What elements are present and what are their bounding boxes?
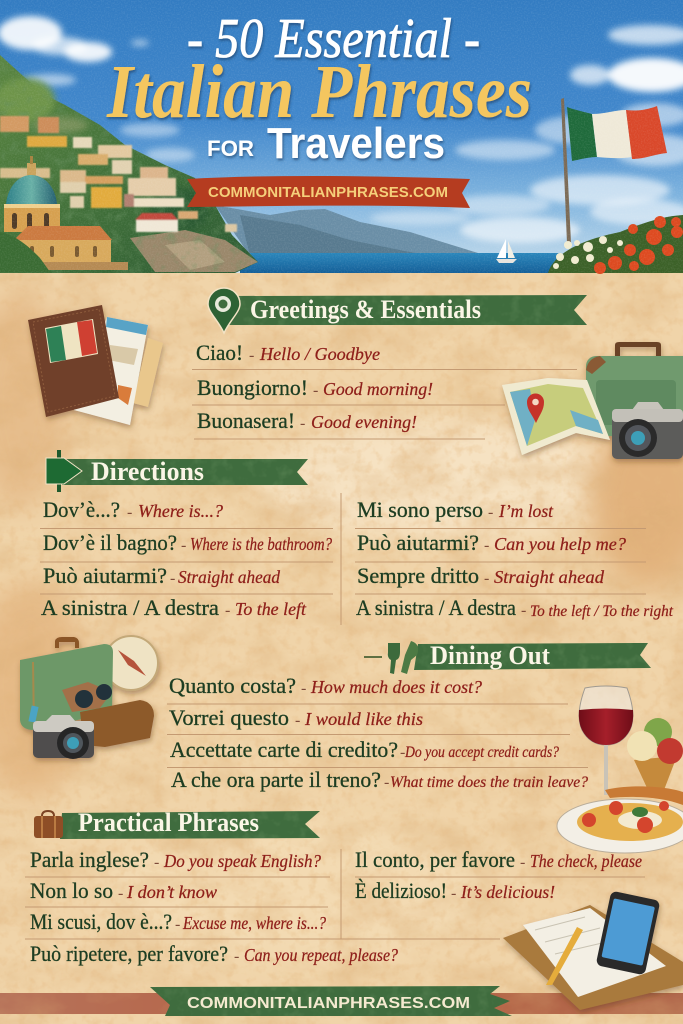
title line 2: Italian Phrases (106, 50, 532, 134)
phrases: directions right column: I’m lost (498, 501, 554, 521)
phrases: practical left column: Mi scusi, dov è...? (30, 909, 172, 934)
domed church (4, 156, 128, 270)
section banner: practical: Practical Phrases (78, 808, 259, 837)
italian flag (567, 106, 667, 161)
phrases: practical left column: Può ripetere, per favore? (30, 941, 228, 966)
section: directions (40, 450, 674, 625)
section banner: greetings (228, 295, 587, 325)
section banner: directions: Directions (91, 457, 204, 486)
phrases: directions right column: Può aiutarmi? (357, 530, 479, 555)
illustration: suitcase, map and camera (502, 342, 683, 459)
phrases: practical right column: È delizioso! (355, 878, 447, 903)
phrases: dining: - (301, 680, 306, 697)
section: practical phrases (25, 808, 645, 966)
icon: brown suitcase (34, 811, 63, 838)
phrases: directions left column: - (170, 570, 175, 587)
phrase: Buonasera: - (300, 415, 305, 432)
section banner: greetings: Greetings & Essentials (250, 295, 481, 324)
phrases: directions right column: - (521, 602, 526, 619)
phrases: practical right column: - (451, 885, 456, 902)
phrases: directions right column: Mi sono perso (357, 497, 483, 522)
title line 3: FOR (207, 136, 254, 161)
phrases: directions right column: Straight ahead (494, 567, 605, 587)
foreground bush (0, 232, 50, 272)
icon: fork and knife (364, 641, 418, 674)
phrases: directions right column: Sempre dritto (357, 563, 479, 588)
icon: map pin (208, 288, 240, 333)
hillside (0, 55, 258, 273)
phrases: dining: How much does it cost? (310, 677, 482, 697)
website ribbon: COMMONITALIANPHRASES.COM (208, 184, 448, 201)
footer band (0, 986, 683, 1016)
clouds (0, 16, 683, 243)
phrases: directions left column: Straight ahead (178, 567, 281, 587)
phrases: dining: Accettate carte di credito? (170, 737, 398, 762)
phrases: directions left column: Where is...? (138, 501, 223, 521)
phrases: dining: - (400, 744, 405, 761)
phrase: Ciao: Ciao! (196, 340, 243, 365)
phrase: Buongiorno: - (313, 382, 318, 399)
phrases: dining: A che ora parte il treno? (171, 767, 381, 792)
phrases: directions right column: - (484, 537, 489, 554)
header scene (0, 0, 683, 274)
phrases: directions left column: - (127, 504, 132, 521)
illustration: passport and tickets (28, 305, 163, 425)
phrases: directions right column (356, 497, 674, 620)
phrases: practical left column: Can you repeat, please? (244, 945, 398, 965)
section banner: dining: Dining Out (430, 641, 550, 670)
phrases: directions left column: - (225, 602, 230, 619)
phrases: directions left column: Where is the bathroom? (190, 534, 332, 554)
sky (0, 0, 683, 273)
footer ribbon (150, 986, 512, 1016)
phrases: directions right column: A sinistra / A destra (356, 595, 516, 620)
footer ribbon: COMMONITALIANPHRASES.COM (187, 995, 470, 1012)
phrase: Ciao: - (249, 347, 254, 364)
phrases: directions right column: - (488, 504, 493, 521)
website ribbon (187, 176, 470, 208)
phrases: directions right column: Can you help me? (494, 534, 626, 554)
phrases: dining (169, 673, 588, 792)
phrase: Buongiorno: Buongiorno! (197, 375, 308, 400)
phrases: practical left column: Non lo so (30, 878, 113, 903)
phrases: practical left column: - (154, 854, 159, 871)
phrases: dining: Vorrei questo (169, 705, 289, 730)
phrases: directions right column: To the left / To the right (530, 603, 674, 620)
phrases: dining: I would like this (304, 709, 423, 729)
phrases: directions left column: A sinistra / A destra (41, 595, 219, 620)
phrases: practical left column: - (118, 885, 123, 902)
gelato (627, 718, 683, 790)
phrase: Buongiorno (197, 375, 433, 400)
phrase: Ciao: Hello / Goodbye (259, 344, 380, 364)
phrases: practical left column: Do you speak English? (163, 851, 321, 871)
sailboat (496, 239, 517, 263)
phrases: directions left column: Dov’è il bagno? (43, 530, 177, 555)
phrases: directions left column: Dov’è...? (43, 497, 120, 522)
phrases: dining: What time does the train leave? (390, 774, 588, 791)
phrases: dining: - (295, 712, 300, 729)
illustration: luggage, compass, sunglasses and camera (20, 636, 158, 759)
section: greetings and essentials (192, 288, 587, 439)
phrases: directions left column: - (181, 537, 186, 554)
illustration: notebook, pencil and phone (503, 891, 683, 1010)
wine glass (579, 686, 633, 795)
phrases: practical right column: Il conto, per favore (355, 847, 515, 872)
title (106, 8, 532, 168)
illustration: wine, gelato and pasta (557, 686, 683, 853)
phrases: practical left column: Excuse me, where is...? (182, 913, 326, 933)
phrases: practical left column: - (175, 916, 180, 933)
phrases: practical left column: - (234, 948, 239, 965)
phrases: practical left column: I don’t know (126, 882, 217, 902)
phrases: directions left column (41, 497, 332, 620)
phrases: practical right column: It’s delicious! (460, 882, 555, 902)
section banner: practical (60, 808, 320, 839)
phrases: practical left column (30, 847, 398, 966)
phrase: Buonasera: Good evening! (311, 412, 417, 432)
phrases: dining: Do you accept credit cards? (404, 744, 559, 761)
title line 3: Travelers (267, 119, 445, 168)
phrases: directions left column: To the left (235, 599, 307, 619)
title line 1: - 50 Essential - (187, 8, 480, 70)
icon: direction sign (46, 450, 82, 492)
grain (0, 0, 683, 273)
phrases: practical left column: Parla inglese? (30, 847, 149, 872)
flower bush (548, 215, 683, 274)
section banner: dining (414, 641, 651, 670)
hillside village (0, 116, 237, 232)
phrases: dining: - (384, 774, 389, 791)
phrase: Ciao (196, 340, 380, 365)
phrases: practical right column (355, 847, 642, 903)
section: dining out (167, 641, 651, 792)
phrases: directions left column: Può aiutarmi? (43, 563, 167, 588)
phrases: dining: Quanto costa? (169, 673, 296, 698)
flagpole (561, 98, 571, 243)
phrases: practical right column: - (520, 854, 525, 871)
phrases: directions right column: - (484, 570, 489, 587)
phrase: Buongiorno: Good morning! (323, 379, 433, 399)
phrases: practical right column: The check, please (530, 851, 642, 871)
phrase: Buonasera (197, 408, 417, 433)
mountains (215, 205, 478, 256)
section banner: directions (62, 457, 308, 486)
pasta plate (557, 786, 683, 853)
phrase: Buonasera: Buonasera! (197, 408, 295, 433)
sea (240, 253, 560, 273)
